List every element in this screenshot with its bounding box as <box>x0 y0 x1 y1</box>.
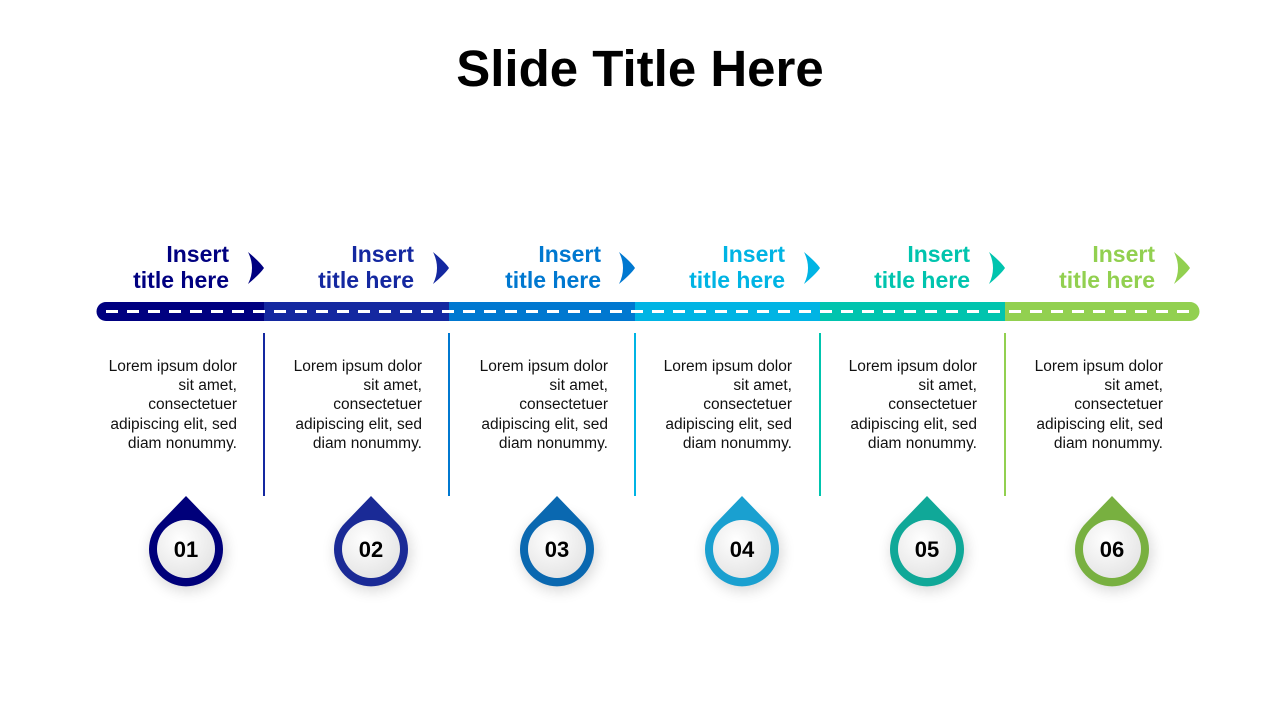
step 1 pin <box>149 496 226 591</box>
step 5 text: diam nonummy. <box>868 435 977 452</box>
step 6 title: title here <box>1059 267 1155 293</box>
divider 4 <box>819 333 821 496</box>
step 5 title: title here <box>874 267 970 293</box>
timeline bar <box>96 302 1200 321</box>
step 4 <box>664 241 820 591</box>
step 3 arrow <box>619 252 635 284</box>
step 5 pin <box>890 496 967 591</box>
step 2 <box>294 241 449 591</box>
divider 2 <box>448 333 450 496</box>
step 5 text: sit amet, <box>918 377 977 394</box>
step 2 text: Lorem ipsum dolor <box>294 358 422 375</box>
step 3 text: adipiscing elit, sed <box>481 416 608 433</box>
step 3 text: sit amet, <box>549 377 608 394</box>
step 4 text: adipiscing elit, sed <box>665 416 792 433</box>
step 5 pin: 05 <box>915 537 939 562</box>
step 6 text: sit amet, <box>1104 377 1163 394</box>
step 5 text: adipiscing elit, sed <box>850 416 977 433</box>
divider 3 <box>634 333 636 496</box>
step 4 pin: 04 <box>730 537 755 562</box>
step 6 text: Lorem ipsum dolor <box>1035 358 1163 375</box>
step 2 pin: 02 <box>359 537 383 562</box>
step 5 text: Lorem ipsum dolor <box>849 358 977 375</box>
step 3 text: diam nonummy. <box>499 435 608 452</box>
step 4 title: title here <box>689 267 785 293</box>
step 1 arrow <box>248 252 264 284</box>
step 2 text: consectetuer <box>333 396 422 413</box>
step 2 text: sit amet, <box>363 377 422 394</box>
step 6 arrow <box>1174 252 1190 284</box>
step 6 text: consectetuer <box>1074 396 1163 413</box>
step 2 pin <box>334 496 411 591</box>
step 1 title: Insert <box>166 241 229 267</box>
step 1 text: diam nonummy. <box>128 435 237 452</box>
step 4 title: Insert <box>722 241 785 267</box>
title: Slide Title Here <box>456 40 824 97</box>
step 3 text: Lorem ipsum dolor <box>480 358 608 375</box>
step 2 title: Insert <box>351 241 414 267</box>
step 3 title: Insert <box>538 241 601 267</box>
step 1 text: consectetuer <box>148 396 237 413</box>
step 3 text: consectetuer <box>519 396 608 413</box>
step 1 text: adipiscing elit, sed <box>110 416 237 433</box>
step 4 pin <box>705 496 782 591</box>
step 5 title: Insert <box>907 241 970 267</box>
step 4 text: Lorem ipsum dolor <box>664 358 792 375</box>
step 1 text: Lorem ipsum dolor <box>109 358 237 375</box>
step 5 arrow <box>989 252 1005 284</box>
step 3 pin <box>520 496 597 591</box>
step 1 title: title here <box>133 267 229 293</box>
divider 1 <box>263 333 265 496</box>
step 3 title: title here <box>505 267 601 293</box>
step 1 text: sit amet, <box>178 377 237 394</box>
step 6 pin <box>1075 496 1152 591</box>
divider 5 <box>1004 333 1006 496</box>
step 5 text: consectetuer <box>888 396 977 413</box>
step 3 pin: 03 <box>545 537 569 562</box>
step 4 arrow <box>804 252 820 284</box>
step 2 text: diam nonummy. <box>313 435 422 452</box>
step 6 <box>1035 241 1190 591</box>
step 4 text: diam nonummy. <box>683 435 792 452</box>
step 6 text: diam nonummy. <box>1054 435 1163 452</box>
step 6 title: Insert <box>1092 241 1155 267</box>
step 1 pin: 01 <box>174 537 198 562</box>
step 3 <box>480 241 635 591</box>
step 2 text: adipiscing elit, sed <box>295 416 422 433</box>
step 2 title: title here <box>318 267 414 293</box>
step 4 text: sit amet, <box>733 377 792 394</box>
step 6 text: adipiscing elit, sed <box>1036 416 1163 433</box>
step 2 arrow <box>433 252 449 284</box>
step 4 text: consectetuer <box>703 396 792 413</box>
step 5 <box>849 241 1005 591</box>
step 1 <box>109 241 264 591</box>
step 6 pin: 06 <box>1100 537 1124 562</box>
